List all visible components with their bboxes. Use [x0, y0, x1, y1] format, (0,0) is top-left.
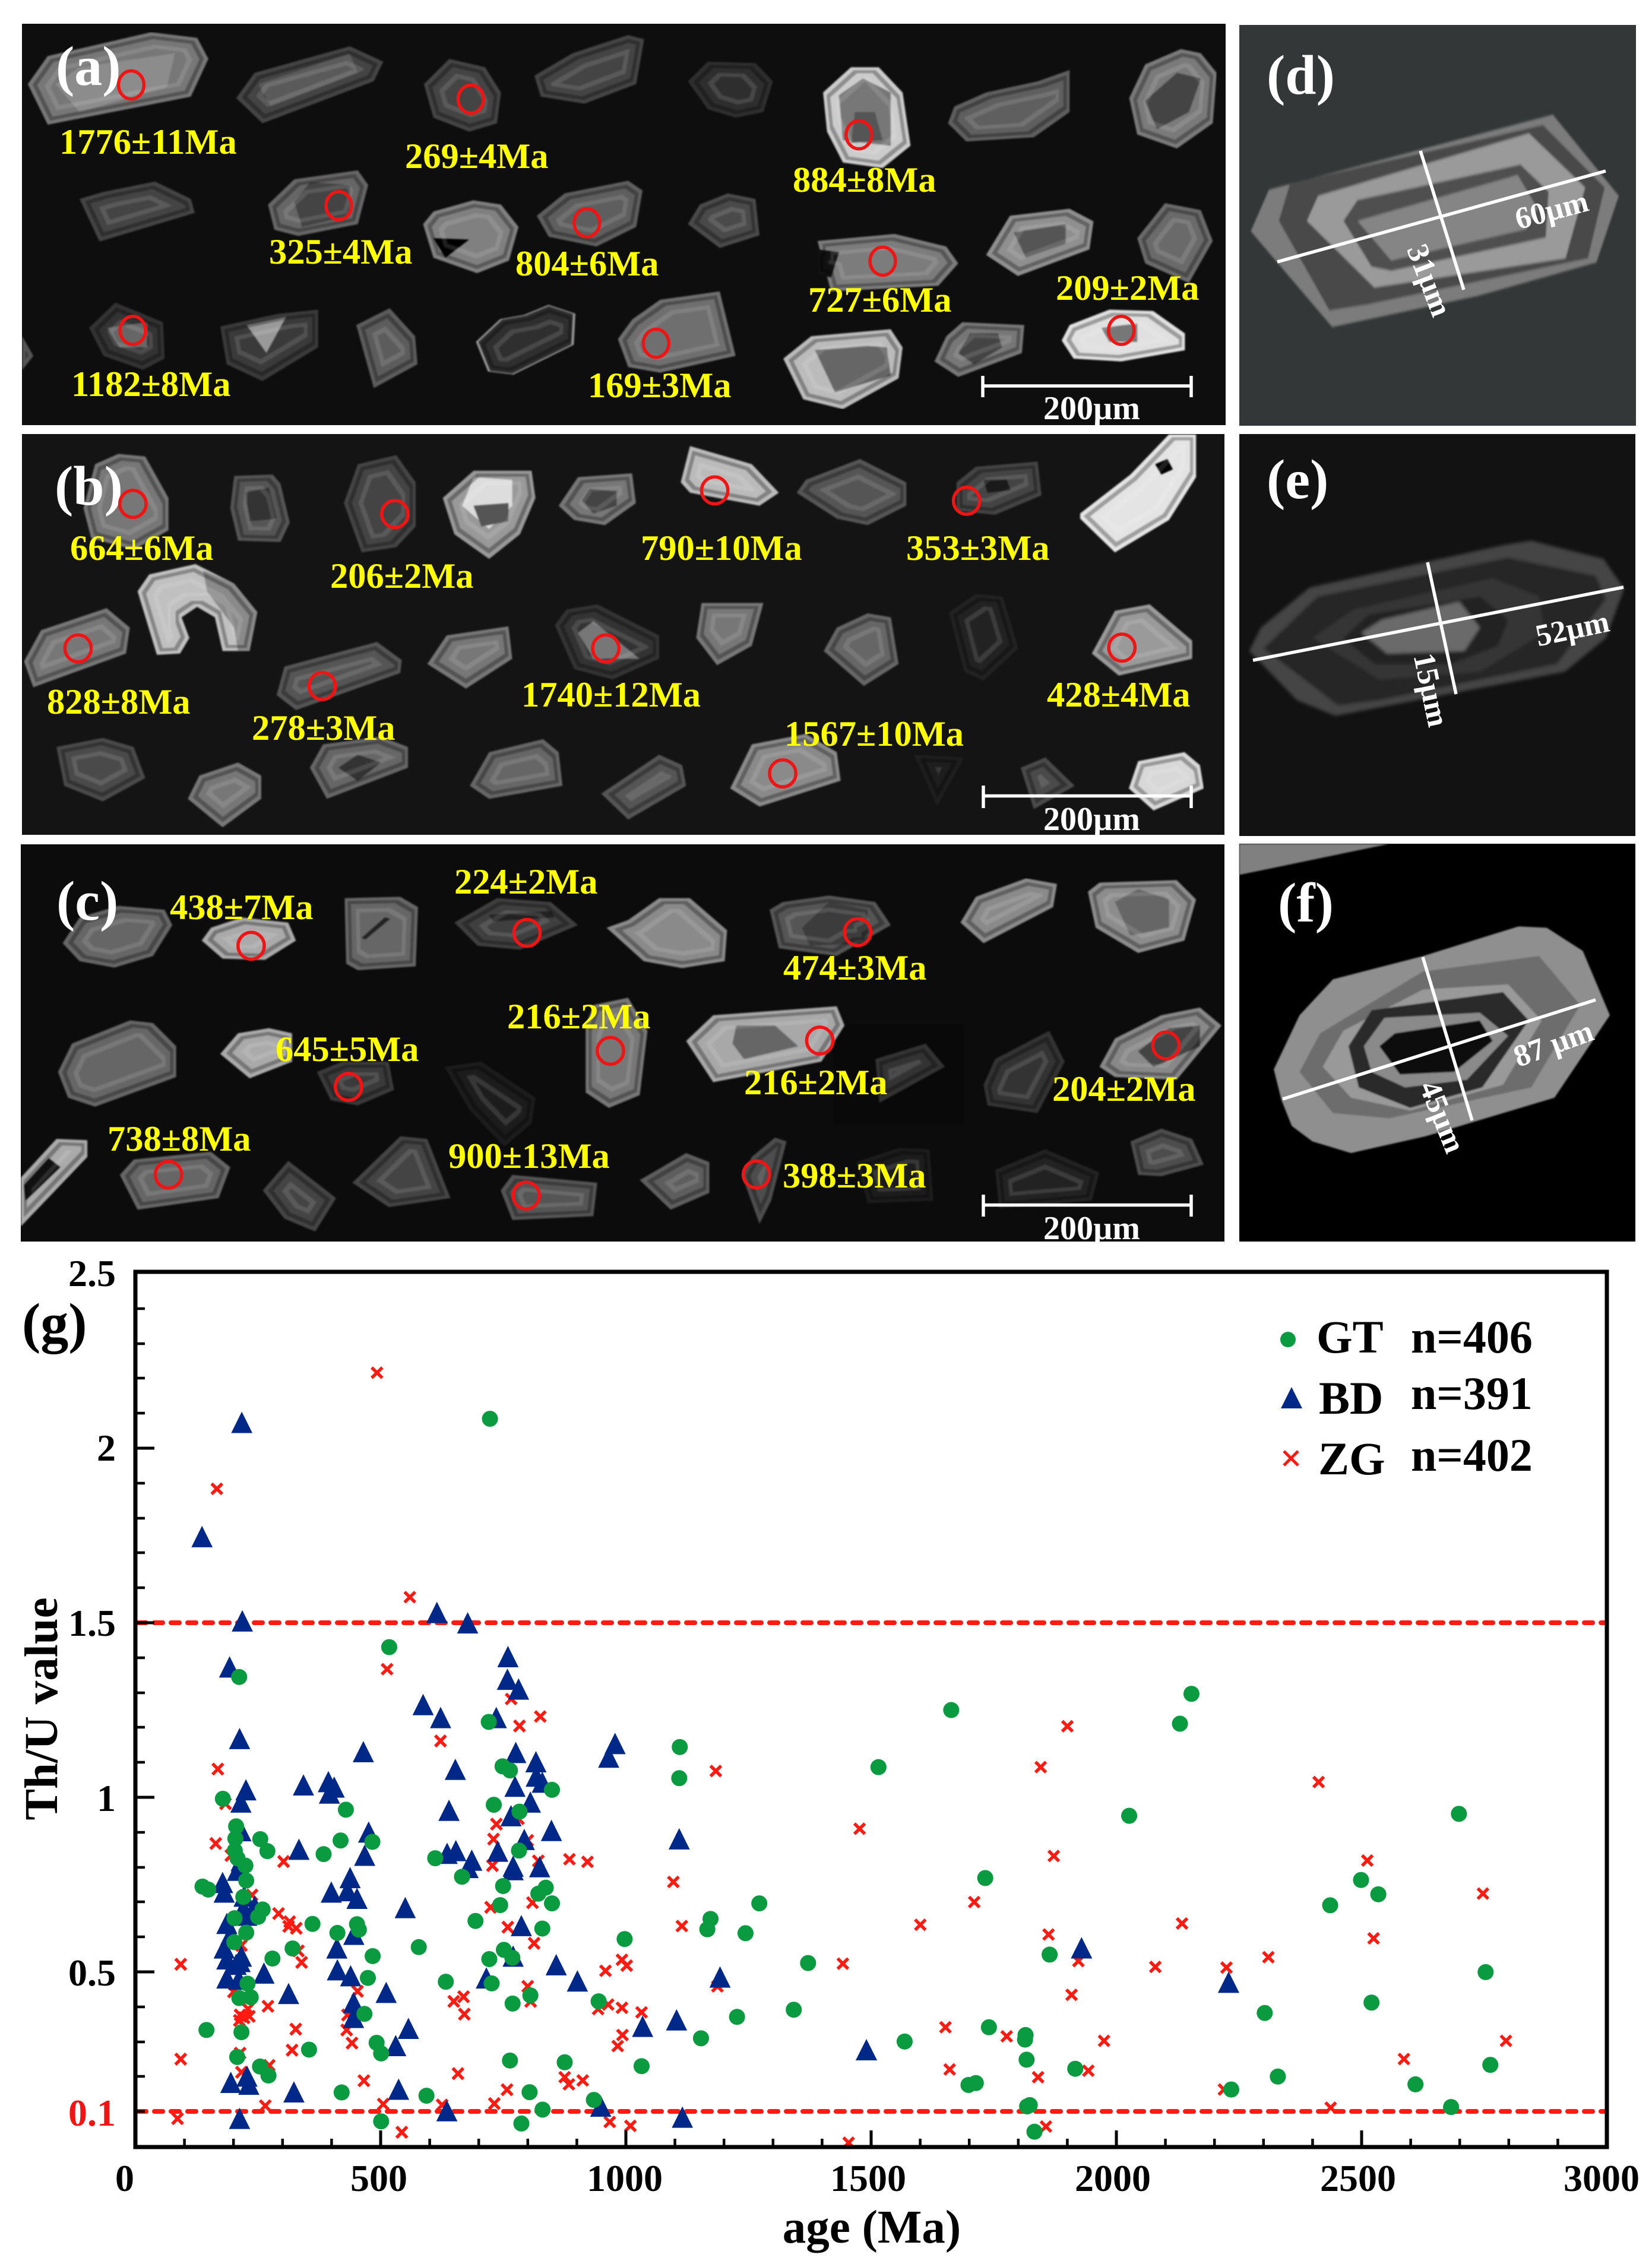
legend entry BD [1281, 1367, 1533, 1424]
age labels (b): 1567±10Ma [784, 714, 964, 754]
x-axis tick labels: 3000 [1564, 2157, 1640, 2199]
age labels (b): 353±3Ma [906, 528, 1050, 568]
x-axis title: age (Ma) [783, 2202, 961, 2253]
age labels (a) [59, 122, 1200, 406]
dimension labels (d): 31µm [1400, 239, 1458, 321]
x-axis tick labels: 0 [115, 2157, 134, 2199]
dimension labels (f): 87 µm [1509, 1014, 1598, 1074]
panel letter (d): (d) [1267, 45, 1335, 106]
age labels (b): 1740±12Ma [521, 675, 701, 715]
x-axis tick labels: 1000 [587, 2157, 663, 2199]
legend entry ZG: n=402 [1411, 1429, 1533, 1481]
y-axis tick labels: 2.5 [68, 1252, 116, 1294]
age labels (a): 269±4Ma [405, 137, 549, 176]
age labels (c): 900±13Ma [448, 1136, 610, 1176]
x-axis tick labels: 500 [350, 2157, 407, 2199]
panel: (b) zircon CL images [22, 434, 1224, 838]
panel: (e) single zircon [1239, 434, 1635, 836]
age labels (c): 438±7Ma [170, 888, 314, 927]
age labels (c): 474±3Ma [783, 948, 927, 988]
legend entry BD: n=391 [1411, 1367, 1533, 1419]
age labels (c): 216±2Ma [507, 997, 651, 1037]
panel letter (e): (e) [1267, 449, 1328, 511]
dimension labels (f): 45µm [1413, 1076, 1471, 1158]
dimension labels (d): 60µm [1511, 185, 1592, 236]
age labels (b) [47, 528, 1191, 754]
x-axis tick labels: 1500 [830, 2157, 906, 2199]
age labels (c) [107, 862, 1196, 1196]
age labels (a): 1182±8Ma [71, 365, 230, 404]
panel: (f) single zircon [1239, 844, 1635, 1242]
analysis spots (b) [65, 477, 1135, 787]
legend entry ZG [1284, 1429, 1533, 1484]
age labels (a): 727±6Ma [808, 280, 952, 320]
dark image patch (c) [833, 1024, 964, 1123]
y-axis tick labels: 1 [97, 1777, 116, 1819]
age labels (a): 804±6Ma [515, 244, 659, 284]
legend [1280, 1311, 1533, 1484]
scale bar (a): 200µm [1043, 390, 1140, 427]
age labels (b): 664±6Ma [70, 528, 214, 568]
age labels (a): 1776±11Ma [59, 122, 237, 162]
scale bar (c): 200µm [1043, 1210, 1140, 1247]
zircon grains (b) [24, 435, 1204, 827]
zircon crystal (f) [1239, 844, 1610, 1153]
age labels (b): 206±2Ma [330, 556, 474, 596]
y-axis tick labels [68, 1252, 116, 2134]
panel: (c) zircon CL images [21, 844, 1224, 1247]
age labels (c): 224±2Ma [454, 862, 598, 902]
threshold lines at Th/U 1.5 and 0.1 [138, 1623, 1606, 2111]
age labels (b): 790±10Ma [641, 528, 802, 568]
y-axis tick labels: 0.1 [68, 2092, 116, 2134]
age labels (a): 169±3Ma [588, 366, 732, 406]
age labels (a): 209±2Ma [1056, 268, 1200, 308]
y-axis tick labels: 2 [97, 1427, 116, 1469]
age labels (a): 884±8Ma [793, 160, 936, 200]
dimension labels (f) [1413, 1014, 1598, 1158]
panel letter (a): (a) [56, 36, 121, 97]
dimension labels (e): 52µm [1533, 605, 1612, 653]
panel: (a) zircon CL images [22, 24, 1226, 427]
age labels (c): 738±8Ma [107, 1119, 251, 1159]
age labels (b): 278±3Ma [252, 708, 395, 748]
zircon grains (a) [22, 32, 1217, 409]
scale bar (a) [983, 376, 1191, 427]
age labels (c): 645±5Ma [276, 1030, 419, 1069]
panel letter (c): (c) [56, 870, 118, 932]
dimension lines (f) [1283, 957, 1596, 1120]
age labels (b): 828±8Ma [47, 682, 191, 722]
panel letter (f): (f) [1278, 872, 1334, 934]
panel letter (b): (b) [55, 455, 123, 517]
age labels (c): 216±2Ma [744, 1063, 888, 1103]
y-axis tick labels: 1.5 [68, 1602, 116, 1644]
age labels (c): 398±3Ma [783, 1156, 926, 1196]
x-axis tick labels: 2500 [1320, 2157, 1396, 2199]
plot frame and axis ticks [135, 1272, 1607, 2147]
legend entry BD: BD [1319, 1372, 1383, 1424]
scale bar (b) [983, 786, 1191, 838]
scale bar (b): 200µm [1043, 801, 1140, 838]
analysis spots (c) [156, 919, 1179, 1209]
panel letter (g): (g) [22, 1293, 87, 1354]
dimension lines (e) [1253, 562, 1623, 694]
zircon crystal (e) [1249, 541, 1624, 716]
dimension labels (e): 15µm [1407, 650, 1455, 730]
x-axis tick labels: 2000 [1075, 2157, 1151, 2199]
zircon grains (c) [21, 878, 1221, 1231]
series: ZG red crosses [172, 1367, 1511, 2148]
legend entry GT [1280, 1311, 1533, 1363]
analysis spots (a) [119, 71, 1134, 357]
y-axis title: Th/U value [16, 1597, 68, 1820]
chart: (g) Th/U value vs age scatter [16, 1252, 1640, 2253]
age labels (a): 325±4Ma [269, 232, 413, 272]
zircon crystal (d) [1251, 115, 1619, 327]
panel: (d) single zircon [1239, 25, 1636, 426]
series: BD blue triangles [191, 1411, 1239, 2129]
legend entry ZG: ZG [1318, 1433, 1385, 1484]
legend entry GT: GT [1316, 1311, 1384, 1363]
legend entry GT: n=406 [1411, 1311, 1533, 1363]
age labels (c): 204±2Ma [1052, 1069, 1196, 1109]
dimension labels (d) [1400, 185, 1592, 321]
dimension labels (e) [1407, 605, 1612, 730]
dimension lines (d) [1277, 151, 1606, 290]
y-axis tick labels: 0.5 [68, 1952, 116, 1994]
x-axis tick labels [115, 2157, 1640, 2199]
series: GT green circles [202, 1419, 1490, 2132]
scale bar (c) [983, 1195, 1191, 1247]
age labels (b): 428±4Ma [1047, 675, 1191, 715]
